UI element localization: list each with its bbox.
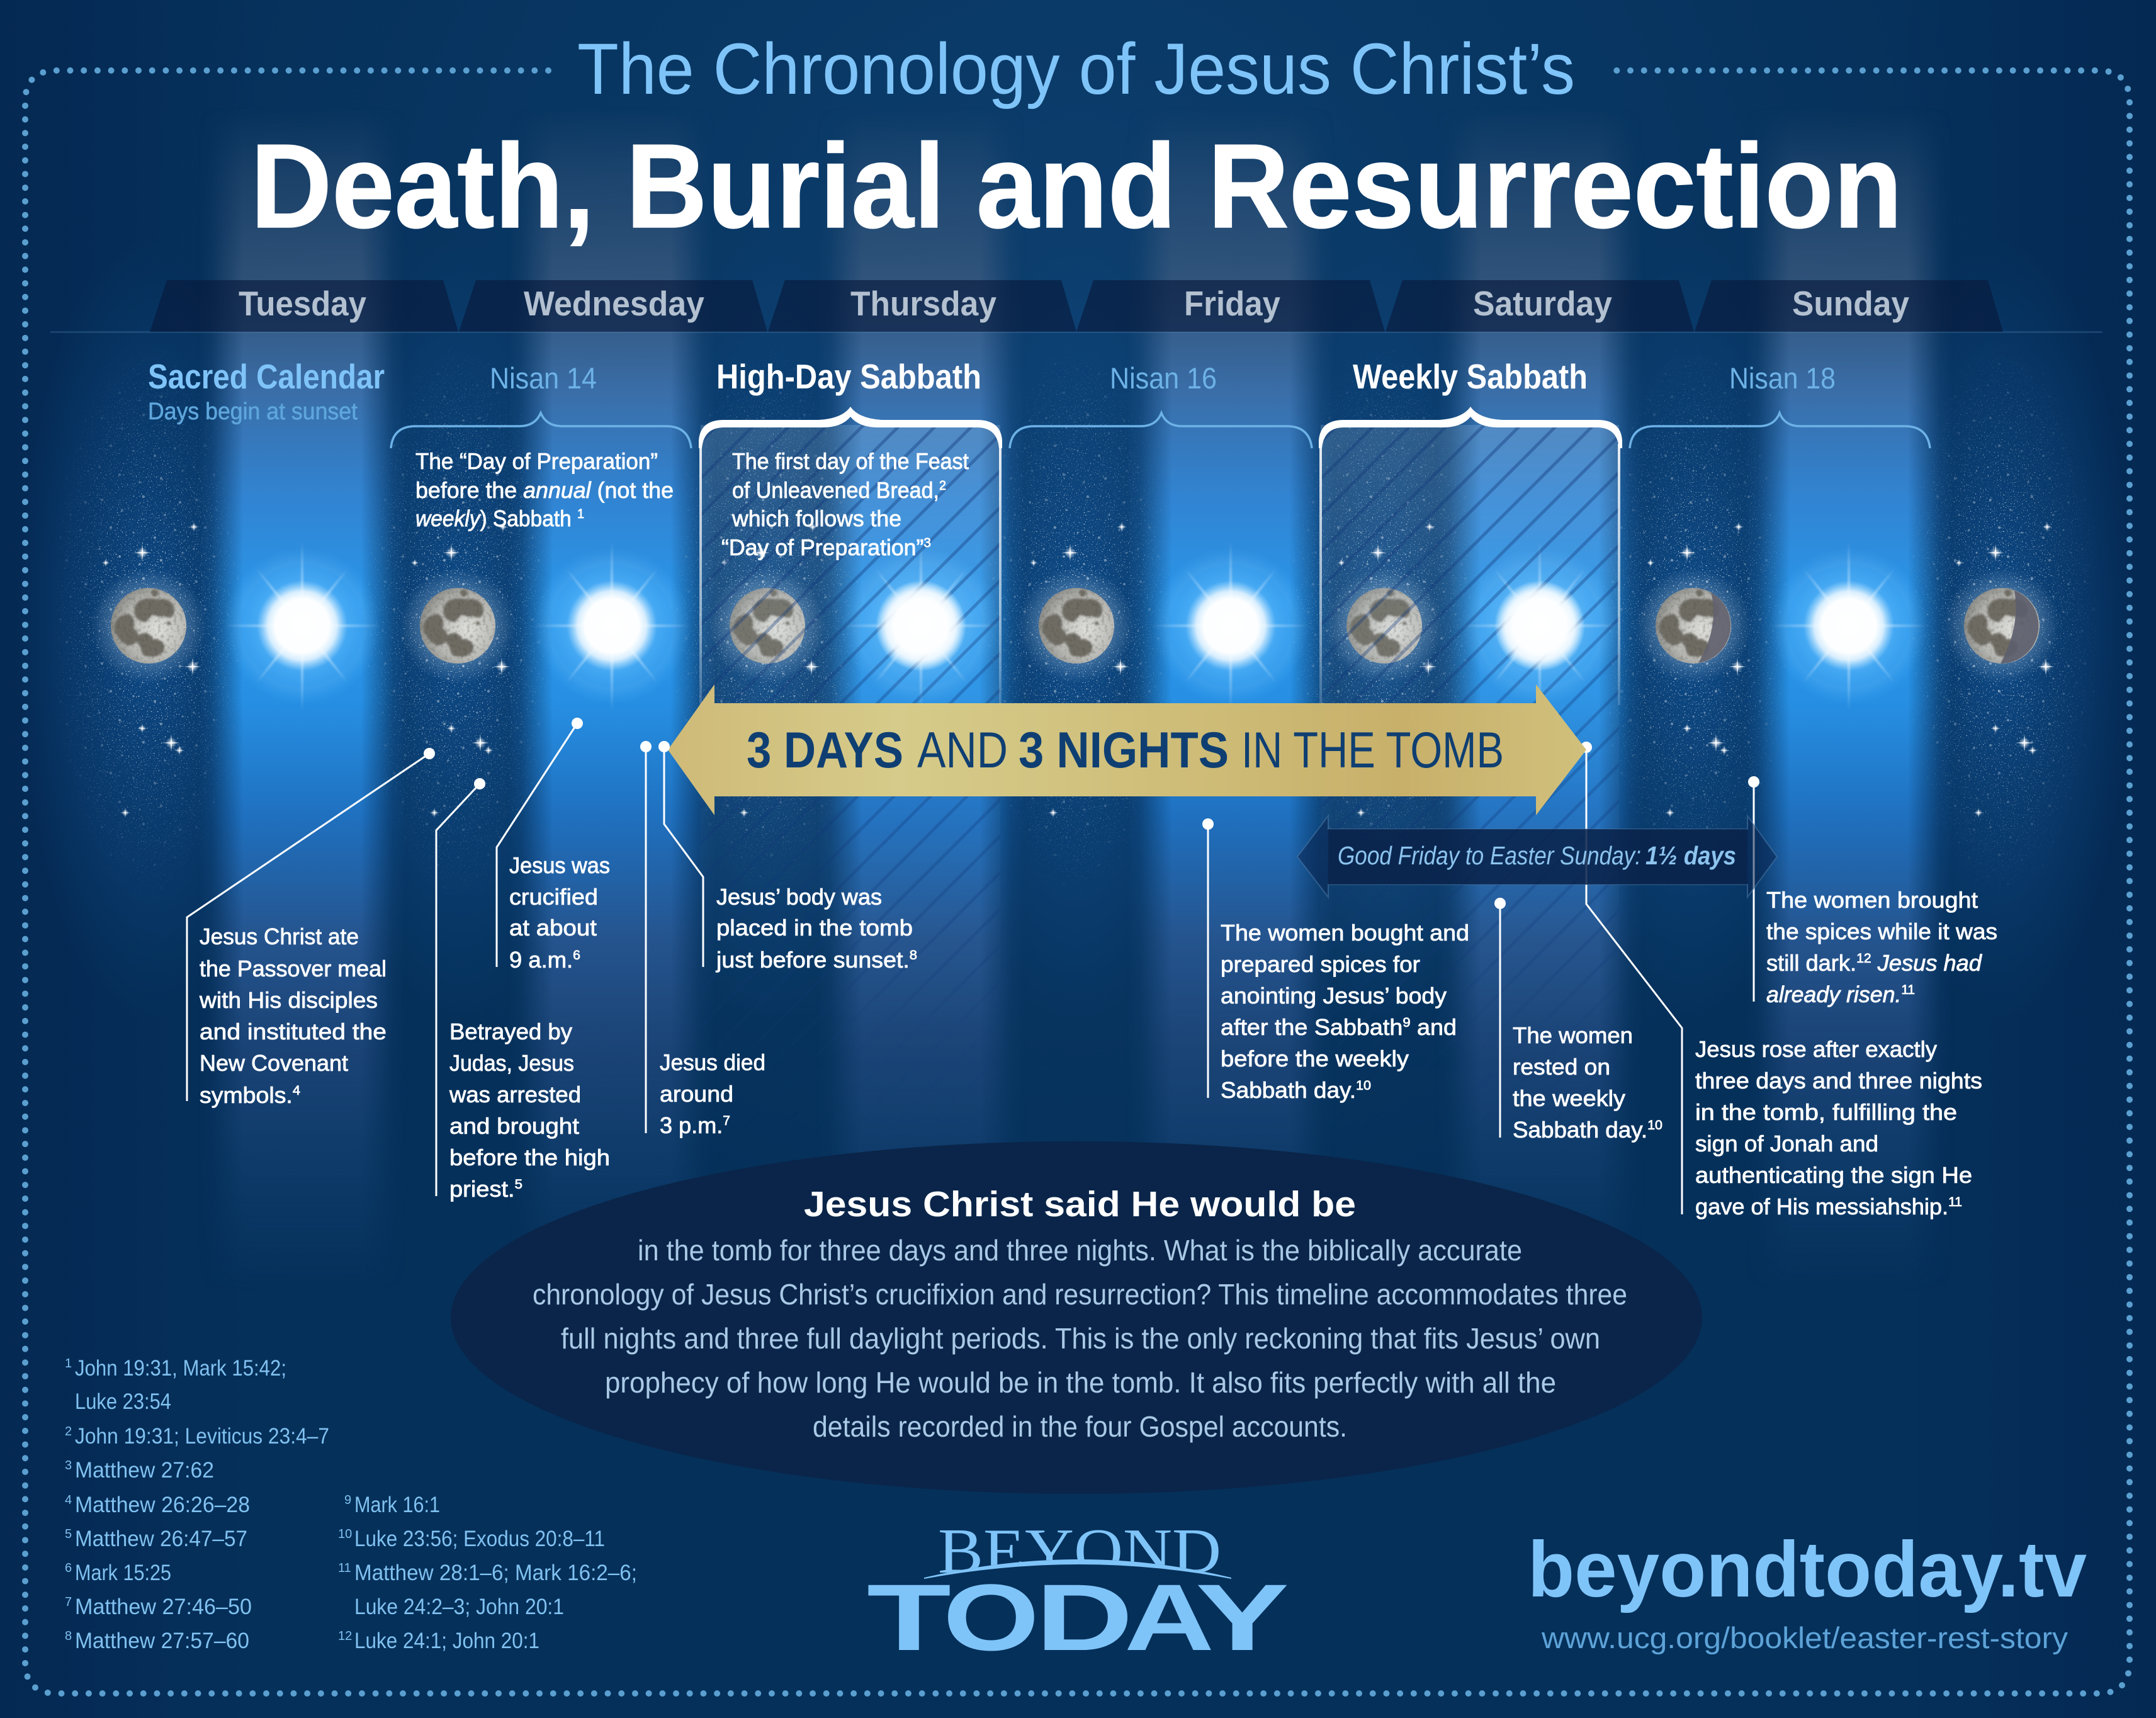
tab: Tuesday: Tuesday: [239, 284, 366, 323]
brace: Nisan 16: [1010, 413, 1312, 448]
text: Jesus rose: in the tomb, fulfilling the: [1695, 1099, 1957, 1125]
footnotes: left column: 2: [65, 1425, 72, 1438]
sacred calendar label: Days begin at sunset: [148, 398, 358, 425]
text: women brought spices: still dark.: [1766, 950, 1856, 976]
text: Day of Preparation: [415, 448, 674, 531]
callout: Betrayed: priest.: [449, 1176, 511, 1202]
arrow: Good Friday to Easter Sunday: Good Friday to Easter Sunday:: [1338, 841, 1641, 870]
callout: Passover: New Covenant: [200, 1050, 348, 1076]
website: booklet url: www.ucg.org/booklet/easter-rest-story: [1541, 1621, 2069, 1654]
callout: women rested: the weekly: [1513, 1085, 1625, 1111]
callout: women rested: [1494, 898, 1662, 1143]
callout: crucified: Jesus was: [509, 852, 610, 878]
heading: High-Day Sabbath: High-Day Sabbath: [716, 357, 981, 396]
callout: Betrayed: before the high: [449, 1144, 610, 1170]
tab: Saturday: [1386, 280, 1694, 332]
text: first day of the Feast: 2: [939, 478, 946, 493]
suns: [223, 541, 1927, 711]
footnotes: left column: 1: [65, 1357, 72, 1370]
text: first day of the Feast: of Unleavened Bread,: [732, 477, 951, 503]
callout: Passover: and instituted the: [200, 1019, 387, 1044]
footnotes: left column: Matthew 26:26–28: [75, 1493, 250, 1517]
text: Jesus rose: 11: [1948, 1195, 1962, 1209]
footnotes: right column: Luke 23:56; Exodus 20:8–11: [354, 1527, 605, 1551]
tab: Saturday: Saturday: [1473, 284, 1612, 323]
footnotes: left column: 7: [65, 1595, 72, 1609]
logo: Beyond Today: O: [943, 1564, 1039, 1670]
callout: Passover: with His disciples: [199, 987, 378, 1013]
footnotes: left column: 6: [65, 1561, 72, 1575]
text: Jesus rose: three days and three nights: [1695, 1068, 1982, 1094]
callout: placed in the tomb: just before sunset.: [716, 947, 901, 973]
moons: [91, 568, 2060, 684]
tab: Friday: [1076, 280, 1385, 332]
text: first day of the Feast: 3: [923, 536, 931, 550]
footnotes: left column: 4: [65, 1493, 72, 1507]
text: first day of the Feast: “Day of Preparation”: [721, 534, 925, 560]
callout: women rested: The women: [1513, 1022, 1633, 1048]
callout: Betrayed: 5: [515, 1177, 522, 1192]
sacred calendar label: [148, 357, 385, 425]
text: first day of the Feast: which follows the: [731, 506, 901, 531]
title: line 2: Death, Burial and Resurrection: [251, 120, 1902, 253]
callout: Betrayed: Betrayed by: [449, 1019, 572, 1044]
callout: women rested: rested on: [1513, 1054, 1610, 1080]
text: women brought spices: 11: [1901, 983, 1915, 997]
title: line 1: The Chronology of Jesus Christ’s: [577, 29, 1575, 110]
callout: Passover: the Passover meal: [200, 956, 387, 981]
callout: women bought spices: prepared spices for: [1221, 951, 1420, 977]
logo: Beyond Today: [867, 1516, 1289, 1670]
callout: women bought spices: before the weekly: [1221, 1046, 1409, 1071]
footnotes: left column: 3: [65, 1459, 72, 1472]
callout: women bought spices: The women bought and: [1221, 920, 1469, 946]
callout: Betrayed: and brought: [449, 1113, 579, 1139]
callout: women bought spices: after the Sabbath: [1221, 1014, 1394, 1040]
panel: central ellipse: [451, 1141, 1702, 1494]
callout: crucified: at about: [509, 915, 597, 941]
tab: Wednesday: [459, 280, 767, 332]
tab: Tuesday: [150, 280, 458, 332]
text: Jesus rose: authenticating the sign He: [1695, 1162, 1972, 1188]
callout leader lines behind banner: [1581, 742, 1759, 1214]
callout: Betrayed: was arrested: [449, 1082, 581, 1107]
footnotes: left column: Mark 15:25: [75, 1561, 171, 1585]
callout: crucified: 9 a.m.: [509, 947, 572, 973]
sparkles: [101, 522, 2055, 818]
callout: Jesus died: 7: [723, 1114, 730, 1128]
footnotes: right column: 11: [338, 1561, 351, 1575]
footnotes: right column: Matthew 28:1–6; Mark 16:2–6;: [354, 1561, 637, 1585]
body text: full nights and three full daylight periods. This is the only reckoning that fits Jesus’ own: [561, 1322, 1600, 1355]
text: first day of the Feast: The first day of the Feast: [732, 448, 969, 474]
text: Day of Preparation: 1: [577, 507, 584, 521]
text: women brought spices: Jesus had: [1871, 950, 1982, 976]
footnotes: right column: 12: [338, 1629, 352, 1643]
body text: [533, 1234, 1627, 1443]
tab: Wednesday: Wednesday: [524, 284, 704, 323]
footnotes: right column: [338, 1493, 637, 1653]
heading: Nisan 14: Nisan 14: [490, 361, 597, 395]
text: Day of Preparation: weekly) Sabbath: [415, 506, 579, 531]
text: Jesus rose: [1695, 1036, 1982, 1219]
callout: crucified: 6: [573, 948, 580, 963]
arrow: Good Friday to Easter Sunday: 1½ days: [1645, 841, 1736, 870]
footnotes: left column: John 19:31, Mark 15:42;: [75, 1356, 286, 1381]
text: Jesus rose: sign of Jonah and: [1695, 1131, 1878, 1156]
panel: Weekly Sabbath box: [1319, 407, 1622, 905]
brace: Nisan 18: [1630, 413, 1930, 448]
footnotes: right column: Luke 24:2–3; John 20:1: [354, 1595, 564, 1619]
footnotes: left column: Matthew 26:47–57: [75, 1527, 247, 1551]
sacred calendar label: Sacred Calendar: [148, 357, 385, 396]
callout: placed in the tomb: [658, 741, 917, 973]
callout: Betrayed: [436, 778, 610, 1202]
footnotes: right column: Luke 24:1; John 20:1: [354, 1629, 539, 1653]
callout: crucified: [497, 718, 610, 973]
arrow: 3 days and 3 nights in the tomb: AND: [917, 722, 1008, 779]
callout: Passover: [187, 748, 435, 1108]
starfield: [52, 346, 2099, 894]
footnotes: right column: 10: [338, 1527, 352, 1541]
text: Jesus rose: gave of His messiahship.: [1695, 1194, 1947, 1219]
callout: Jesus died: Jesus died: [660, 1049, 765, 1075]
callout: Jesus died: 3 p.m.: [660, 1112, 723, 1138]
callout: women bought spices: [1202, 818, 1469, 1103]
footnotes: left column: Matthew 27:62: [75, 1458, 214, 1483]
callout: Jesus died: around: [660, 1081, 733, 1107]
footnotes: left column: 5: [65, 1527, 72, 1541]
text: women brought spices: [1766, 887, 1997, 1007]
footnotes: right column: Mark 16:1: [354, 1493, 440, 1517]
callout: women bought spices: 9: [1403, 1015, 1411, 1030]
tab: Friday: Friday: [1184, 284, 1280, 323]
arrow: 3 days and 3 nights in the tomb: IN THE TOMB: [1241, 722, 1504, 779]
text: first day of the Feast: [721, 448, 969, 560]
logo: Beyond Today: D: [1036, 1564, 1133, 1670]
body text: chronology of Jesus Christ’s crucifixion and resurrection? This timeline accommodates three: [533, 1278, 1627, 1311]
callout: women bought spices: and: [1411, 1014, 1457, 1040]
body text: details recorded in the four Gospel accounts.: [813, 1410, 1347, 1443]
footnotes: left column: Matthew 27:46–50: [75, 1595, 252, 1619]
website: beyondtoday.tv: beyondtoday.tv: [1528, 1526, 2087, 1613]
callout: women rested: 10: [1647, 1118, 1662, 1133]
text: women brought spices: already risen.: [1766, 981, 1901, 1007]
logo: Beyond Today: BEYOND: [938, 1516, 1221, 1587]
daylight beams: [189, 107, 1962, 1291]
callout: Jesus died: [640, 741, 765, 1138]
callout: women bought spices: anointing Jesus’ body: [1221, 983, 1447, 1009]
footnotes: left column: Matthew 27:57–60: [75, 1629, 249, 1653]
brace: Nisan 14: [391, 413, 691, 448]
heading: Weekly Sabbath: Weekly Sabbath: [1353, 357, 1588, 396]
day header tabs: [50, 280, 2102, 333]
arrow: 3 days and 3 nights in the tomb: 3 NIGHTS: [1019, 722, 1229, 779]
tab: Sunday: Sunday: [1792, 284, 1909, 323]
heading: Jesus Christ said: Jesus Christ said He would be: [804, 1184, 1356, 1224]
footnotes: left column: Luke 23:54: [75, 1389, 171, 1414]
panel: High-Day Sabbath box: [699, 407, 1002, 905]
text: women brought spices: The women brought: [1766, 887, 1978, 913]
footnotes: left column: [65, 1356, 329, 1653]
callout: women rested: Sabbath day.: [1513, 1117, 1644, 1143]
callout: placed in the tomb: placed in the tomb: [716, 915, 913, 941]
tab: Sunday: [1695, 280, 2003, 332]
heading: Nisan 16: Nisan 16: [1110, 361, 1217, 395]
callout: crucified: crucified: [509, 884, 598, 910]
callout: Passover: symbols.: [200, 1082, 289, 1108]
callout: Passover: Jesus Christ ate: [200, 924, 359, 949]
tab: Thursday: Thursday: [850, 284, 996, 323]
footnotes: left column: 8: [65, 1629, 72, 1643]
callout: Passover: 4: [293, 1083, 300, 1098]
body text: in the tomb for three days and three nights. What is the biblically accurate: [638, 1234, 1522, 1267]
text: Day of Preparation: before the annual (not the: [415, 477, 674, 503]
arrow: Good Friday to Easter Sunday: [1297, 816, 1777, 897]
callout: women bought spices: Sabbath day.: [1221, 1077, 1352, 1103]
callout: women bought spices: 10: [1356, 1078, 1371, 1093]
callout: Betrayed: Judas, Jesus: [449, 1050, 574, 1076]
footnotes: right column: 9: [344, 1493, 351, 1507]
night columns glow: [16, 239, 2134, 1020]
logo: Beyond Today: A: [1124, 1564, 1214, 1670]
callout: placed in the tomb: 8: [910, 948, 917, 963]
logo: Beyond Today: T: [867, 1564, 951, 1670]
text: Day of Preparation: The “Day of Preparation”: [415, 448, 658, 474]
arrow: 3 days and 3 nights in the tomb: 3 DAYS: [747, 722, 903, 779]
logo: Beyond Today: Y: [1195, 1564, 1289, 1670]
heading: Nisan 18: Nisan 18: [1729, 361, 1836, 395]
tab: Thursday: [768, 280, 1076, 332]
text: women brought spices: 12: [1856, 951, 1871, 966]
callout: placed in the tomb: Jesus’ body was: [716, 884, 882, 910]
arrow: 3 days and 3 nights in the tomb: [668, 684, 1586, 815]
text: women brought spices: the spices while it was: [1766, 918, 1997, 944]
body text: prophecy of how long He would be in the tomb. It also fits perfectly with all the: [605, 1366, 1556, 1399]
text: Jesus rose: Jesus rose after exactly: [1695, 1036, 1937, 1062]
footnotes: left column: John 19:31; Leviticus 23:4–7: [75, 1424, 329, 1449]
